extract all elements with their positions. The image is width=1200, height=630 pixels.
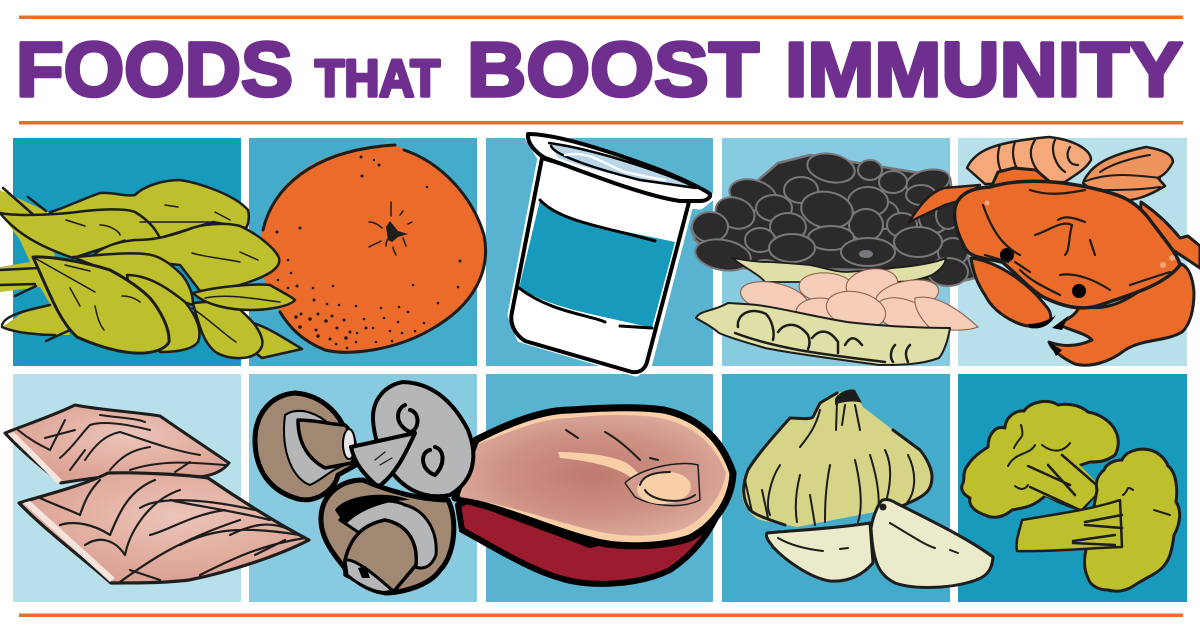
icon: orange (260, 144, 486, 352)
crab upper pincer (909, 185, 980, 222)
title: IMMUNITY (785, 27, 1183, 113)
left mushroom (255, 393, 356, 500)
icon: black beans (691, 149, 975, 286)
icon: red ham steak (455, 408, 733, 584)
title: THAT (315, 50, 440, 108)
icon: broccoli (962, 401, 1180, 591)
title: BOOST (467, 27, 759, 113)
broccoli stalk branches (1030, 455, 1102, 510)
icon: shells behind crab (967, 137, 1173, 200)
crab right arm (1140, 202, 1200, 268)
garlic bulb (742, 389, 932, 527)
garlic cloves (766, 500, 993, 587)
crab shell (955, 181, 1180, 308)
title (16, 27, 1183, 113)
icon: mushrooms (255, 382, 473, 593)
top orange rule (19, 16, 1183, 19)
floret top left (962, 401, 1118, 517)
lower mushroom (321, 480, 454, 593)
crab left claw (971, 258, 1051, 326)
broccoli stalk back (1030, 457, 1100, 510)
crab eye stalks (990, 168, 1050, 190)
broccoli lower stalk (1017, 500, 1122, 551)
icon: crab (909, 168, 1200, 365)
floret right (1084, 449, 1180, 591)
icon: yogurt cup (511, 134, 710, 372)
icon: fish fillets (5, 405, 309, 583)
almonds (738, 266, 978, 341)
top pea pod (732, 258, 946, 282)
icon: peas and almonds (696, 258, 978, 365)
crab bottom claw (1049, 262, 1194, 365)
middle orange rule (19, 121, 1183, 124)
spinach back mass (0, 190, 70, 335)
bottom orange rule (19, 614, 1183, 617)
icon: garlic bulb and cloves (742, 389, 993, 587)
lower pea pod (696, 303, 950, 365)
title: FOODS (16, 27, 293, 113)
icon: spinach leaves (0, 180, 302, 358)
top mushroom (351, 382, 473, 496)
tile grid (13, 138, 1187, 602)
